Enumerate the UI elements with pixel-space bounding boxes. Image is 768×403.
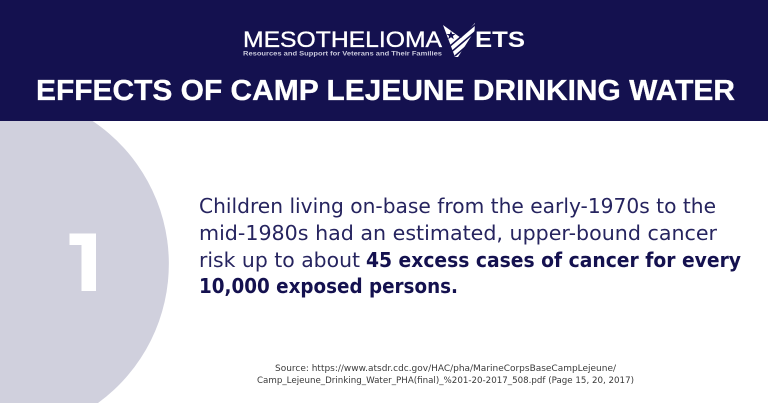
line 3: [199, 248, 741, 272]
body text: [199, 194, 741, 298]
logo tagline: Resources and Support for Veterans and Their Families: [243, 52, 443, 58]
logo wordmark right: ETS: [475, 27, 525, 52]
number circle: [0, 121, 169, 403]
line 3: 45 excess cases of cancer for every: [366, 248, 741, 272]
source line 1: Source: https://www.atsdr.cdc.gov/HAC/pha/MarineCorpsBaseCampLejeune/: [275, 364, 616, 374]
icon: chevron star badge: [443, 23, 476, 57]
logo: [243, 23, 525, 58]
source citation: [257, 364, 634, 386]
logo wordmark left: MESOTHELIOMA: [243, 27, 442, 52]
line 3: risk up to about: [199, 248, 360, 272]
source line 2: Camp_Lejeune_Drinking_Water_PHA(final)_%201-20-2017_508.pdf (Page 15, 20, 2017): [257, 376, 634, 386]
line 4: 10,000 exposed persons.: [199, 274, 458, 298]
number 1: [70, 234, 96, 291]
line 1: Children living on-base from the early-1970s to the: [199, 194, 716, 218]
title: EFFECTS OF CAMP LEJEUNE DRINKING WATER: [36, 75, 735, 107]
header banner: [0, 0, 768, 121]
line 2: mid-1980s had an estimated, upper-bound cancer: [199, 221, 718, 245]
